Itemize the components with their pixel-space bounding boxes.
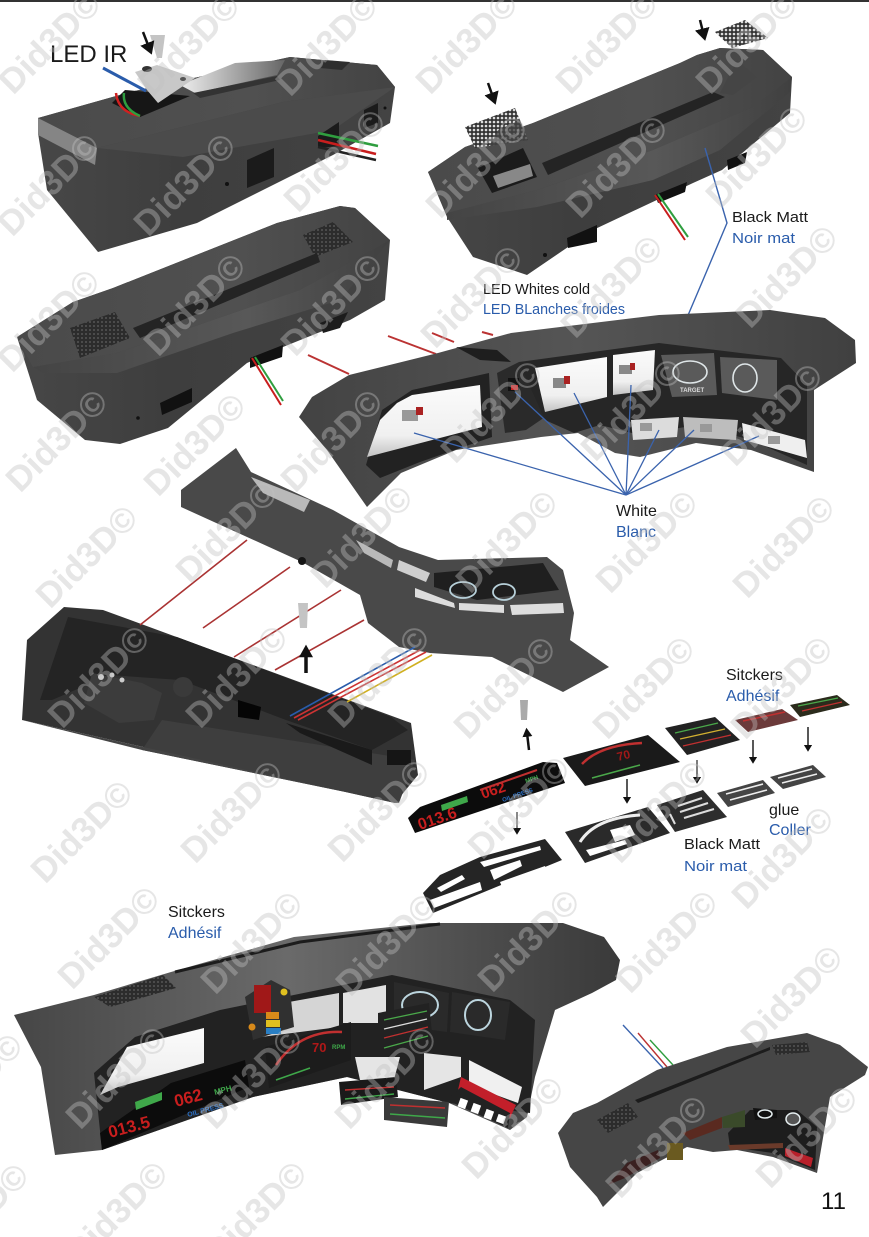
watermark grid: Did3D© bbox=[320, 752, 438, 869]
sticker: rpm: 70 bbox=[615, 747, 632, 764]
center white bbox=[261, 993, 339, 1037]
low white bbox=[355, 1057, 400, 1087]
slot bbox=[286, 723, 372, 765]
bezel frame bbox=[447, 1087, 510, 1128]
inner recess bbox=[434, 563, 559, 600]
plate: main bbox=[423, 839, 562, 913]
plate: list large bbox=[657, 790, 727, 832]
sticker: main speed: MPH bbox=[213, 1084, 233, 1097]
sticker: small list 2 bbox=[384, 1097, 449, 1127]
watermark grid: Did3D© bbox=[573, 351, 691, 468]
watermark grid: Did3D© bbox=[136, 386, 254, 503]
panel: housing top view bbox=[17, 206, 390, 444]
holes bbox=[160, 388, 192, 415]
watermark grid: Did3D© bbox=[50, 879, 168, 996]
highlight bbox=[180, 60, 285, 93]
band bbox=[447, 77, 792, 220]
watermark grid: Did3D© bbox=[598, 1088, 716, 1205]
watermark grid: Did3D© bbox=[193, 1019, 311, 1136]
sticker: main speed: MPH bbox=[525, 775, 539, 785]
watermark grid: Did3D© bbox=[588, 483, 706, 600]
grid bbox=[387, 750, 411, 765]
watermark grid: Did3D© bbox=[136, 246, 254, 363]
lamp hole bbox=[478, 148, 537, 193]
screw and arrow up bbox=[298, 603, 308, 673]
wires bbox=[655, 195, 685, 240]
watermark grid: Did3D© bbox=[454, 1069, 572, 1186]
screen logo bbox=[450, 992, 510, 1040]
label: Noir mat lower: Noir mat bbox=[684, 858, 748, 875]
watermark grid: Did3D© bbox=[608, 883, 726, 1000]
watermark grid: Did3D© bbox=[723, 629, 841, 746]
bracket bbox=[135, 65, 195, 103]
dark column bbox=[497, 362, 548, 433]
watermark grid: Did3D© bbox=[433, 353, 551, 470]
label: Noir mat top: Noir mat bbox=[732, 230, 796, 247]
housing body bbox=[38, 57, 395, 252]
leader: LED IR bbox=[103, 68, 146, 91]
watermark grid: Did3D© bbox=[28, 498, 146, 615]
shell bbox=[14, 923, 620, 1155]
watermark grid: Did3D© bbox=[23, 773, 141, 890]
sticker: rpm bbox=[265, 1022, 351, 1088]
watermark grid: Did3D© bbox=[585, 629, 703, 746]
watermark grid: Did3D© bbox=[273, 246, 391, 363]
watermark grid: Did3D© bbox=[40, 618, 158, 735]
watermark grid: Did3D© bbox=[598, 753, 716, 870]
panel: dashboard frame exploded bbox=[181, 448, 609, 692]
label: LED BLanches froides: LED BLanches froides bbox=[483, 301, 625, 318]
label: Sitckers bottom: Sitckers bbox=[168, 904, 225, 921]
plate: rpm bbox=[565, 807, 670, 863]
wires bbox=[318, 133, 378, 146]
arrow bbox=[143, 32, 150, 50]
shell bbox=[22, 607, 418, 803]
screw bbox=[150, 35, 165, 58]
holes bbox=[567, 225, 597, 248]
inner recess bbox=[94, 975, 535, 1150]
sticker: rpm: RPM bbox=[332, 1045, 345, 1051]
watermark grid: Did3D© bbox=[713, 356, 831, 473]
dark vent bbox=[456, 347, 511, 362]
watermark grid: Did3D© bbox=[725, 488, 843, 605]
screen TARGET: TARGET bbox=[680, 388, 705, 394]
sticker: list large bbox=[665, 717, 740, 755]
watermark grid: Did3D© bbox=[168, 473, 286, 590]
label: Sitckers: Sitckers bbox=[726, 667, 783, 684]
sticker: colour column bbox=[245, 980, 294, 1040]
watermark grid: Did3D© bbox=[698, 98, 816, 215]
watermark grid: Did3D© bbox=[728, 218, 846, 335]
band bbox=[97, 87, 395, 157]
watermark grid: Did3D© bbox=[303, 478, 421, 595]
recess bbox=[728, 1110, 817, 1170]
housing top bbox=[38, 57, 395, 148]
watermark grid: Did3D© bbox=[276, 102, 394, 219]
label: Black Matt lower: Black Matt bbox=[684, 836, 761, 853]
watermark grid: Did3D© bbox=[328, 886, 446, 1003]
panel white 2 bbox=[535, 357, 607, 412]
sticker: main speed bbox=[408, 762, 565, 834]
band bbox=[33, 240, 390, 373]
left recess frame bbox=[366, 373, 492, 478]
watermark grid: Did3D© bbox=[446, 629, 564, 746]
watermark grid: Did3D© bbox=[126, 126, 244, 243]
panel white 3 bbox=[613, 350, 655, 395]
holes bbox=[247, 148, 274, 188]
label: Black Matt top: Black Matt bbox=[732, 209, 809, 226]
screens bbox=[753, 1108, 777, 1120]
sticker: rpm: 70 bbox=[312, 1040, 326, 1055]
label: glue: glue bbox=[769, 802, 799, 819]
arrows: sticker placement bbox=[517, 727, 808, 832]
slot bbox=[542, 92, 725, 175]
vent bbox=[597, 1103, 638, 1133]
watermark grid: Did3D© bbox=[413, 238, 531, 355]
sticker: list bbox=[378, 1003, 433, 1057]
mesh plate far bbox=[715, 20, 768, 48]
recess bbox=[40, 617, 408, 750]
panel: lower housing open bbox=[22, 607, 418, 803]
sticker: main speed: 013.6 bbox=[416, 805, 459, 834]
panel: dashboard front painted white bbox=[299, 310, 856, 507]
top page rule bbox=[0, 0, 869, 2]
screen TARGET bbox=[661, 353, 717, 397]
body bbox=[428, 48, 792, 275]
mesh right bbox=[303, 222, 353, 257]
sticker: list medium bbox=[735, 709, 798, 732]
watermark grid: Did3D© bbox=[327, 1019, 445, 1136]
sticker: small list bbox=[339, 1077, 398, 1105]
label: LED Whites cold: LED Whites cold bbox=[483, 281, 590, 298]
watermark grid: Did3D© bbox=[273, 382, 391, 499]
label: LED IR: LED IR bbox=[50, 41, 127, 68]
vent white bbox=[367, 385, 482, 457]
watermark grid: Did3D© bbox=[193, 884, 311, 1001]
label: Adhésif: Adhésif bbox=[726, 688, 780, 705]
lower white strips bbox=[415, 588, 455, 608]
red wires bbox=[308, 355, 349, 374]
watermark grid: Did3D© bbox=[320, 618, 438, 735]
sticker: main speed: 013.5 bbox=[106, 1112, 152, 1142]
hole bbox=[298, 557, 306, 565]
top bbox=[17, 206, 390, 367]
sticker: main speed bbox=[100, 1060, 249, 1150]
opening bbox=[112, 90, 190, 117]
wires in opening bbox=[116, 93, 140, 116]
sticker: main speed: OIL PRESS bbox=[502, 788, 534, 804]
screw and small arrow bbox=[520, 700, 529, 750]
panel: finished dashboard small bbox=[558, 1025, 868, 1207]
lower panel bbox=[142, 720, 415, 803]
shell bbox=[558, 1033, 868, 1207]
white strips bbox=[251, 477, 310, 512]
screen TARGET bbox=[394, 982, 449, 1032]
panel: housing with mesh covers bbox=[428, 20, 792, 275]
ramp bbox=[84, 673, 162, 723]
colored stickers bbox=[608, 1110, 813, 1185]
watermark grid: Did3D© bbox=[0, 382, 116, 499]
panel: finished dashboard large bbox=[14, 923, 620, 1155]
screens bbox=[450, 582, 476, 598]
far mesh bbox=[772, 1042, 810, 1055]
watermark grid: Did3D© bbox=[558, 108, 676, 225]
dark top groove bbox=[175, 924, 440, 972]
wires bbox=[252, 358, 281, 405]
watermark grid: Did3D© bbox=[733, 938, 851, 1055]
sticker: main speed: 062 bbox=[172, 1085, 204, 1111]
frame body bbox=[181, 448, 609, 692]
arrows bbox=[488, 83, 494, 100]
label: Blanc: Blanc bbox=[616, 524, 656, 541]
square hole bbox=[238, 700, 261, 720]
watermark grid: Did3D© bbox=[178, 618, 296, 735]
wires bbox=[623, 1025, 673, 1068]
shell bbox=[299, 310, 856, 507]
sticker: main speed: 062 bbox=[479, 779, 508, 803]
slot bbox=[193, 76, 280, 98]
sticker: rpm bbox=[563, 735, 680, 786]
watermark grid: Did3D© bbox=[418, 108, 536, 225]
top slot bbox=[635, 1047, 770, 1103]
lamp blocks bbox=[402, 410, 418, 421]
wires: red assembly wires bbox=[140, 540, 432, 720]
panel: rear housing with LED IR bbox=[38, 32, 395, 252]
page number: 11 bbox=[821, 1188, 846, 1215]
vent white bbox=[100, 1028, 204, 1095]
slot bbox=[133, 253, 320, 338]
round lug bbox=[173, 677, 193, 697]
sticker: list small bbox=[790, 695, 850, 717]
screws bbox=[98, 674, 104, 680]
leaders: white panels fan bbox=[414, 385, 759, 495]
watermark grid: Did3D© bbox=[448, 483, 566, 600]
watermark grid: Did3D© bbox=[58, 1019, 176, 1136]
label: Coller: Coller bbox=[769, 822, 811, 839]
watermark grid: Did3D© bbox=[553, 228, 671, 345]
mesh plate near bbox=[465, 108, 528, 148]
body bbox=[17, 206, 390, 444]
top bbox=[428, 48, 792, 213]
mesh left bbox=[70, 312, 130, 358]
light chamfer bbox=[38, 118, 97, 165]
plate: list small bbox=[770, 765, 826, 789]
watermark grid: Did3D© bbox=[173, 753, 291, 870]
watermark grid: Did3D© bbox=[470, 882, 588, 999]
recess far bbox=[720, 60, 757, 95]
plate: list medium bbox=[717, 780, 775, 807]
watermark grid: Did3D© bbox=[460, 749, 578, 866]
red lens bbox=[458, 1077, 516, 1118]
label: White: White bbox=[616, 503, 657, 520]
leader: black matt bbox=[686, 148, 727, 320]
screen logo bbox=[720, 357, 777, 400]
watermark grid: Did3D© bbox=[748, 1078, 866, 1195]
sticker: main speed: OIL PRESS bbox=[187, 1102, 225, 1119]
lower panels bbox=[631, 417, 679, 440]
mesh vent bbox=[94, 975, 176, 1007]
watermark grid: Did3D© bbox=[724, 799, 842, 916]
label: Adhésif bottom: Adhésif bbox=[168, 925, 222, 942]
centre recess bbox=[519, 343, 807, 465]
